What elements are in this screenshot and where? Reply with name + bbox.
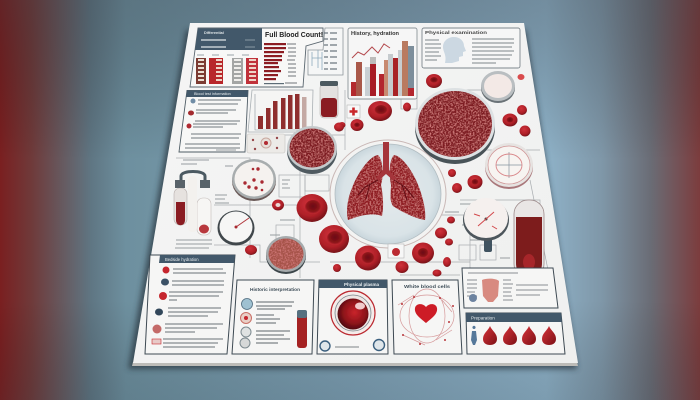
small text fragments <box>175 150 510 258</box>
heading: Physical plasma <box>344 282 380 287</box>
large petri dish <box>415 88 495 164</box>
panel: history, hydration chart <box>348 28 417 99</box>
panel: interpretation <box>232 280 314 354</box>
icons <box>240 298 252 348</box>
lungs <box>347 142 425 220</box>
panel: preparation <box>466 313 565 354</box>
heading: Physical examination <box>425 30 487 35</box>
plasma circle <box>331 291 375 335</box>
lungs circle <box>330 140 446 248</box>
heading: Historic interpretation <box>250 287 300 293</box>
panel: blood test information <box>179 90 248 152</box>
connector lines <box>176 90 552 290</box>
table columns <box>196 55 258 84</box>
panel: blood test list <box>145 255 235 354</box>
icon: blood drops <box>483 326 556 345</box>
bars <box>351 41 414 96</box>
text lines <box>256 302 294 343</box>
panel: bar chart <box>248 90 313 132</box>
magnifying ring <box>481 71 515 103</box>
panel: white blood cells <box>392 280 462 354</box>
icon: person <box>471 326 477 345</box>
trend line <box>352 44 390 58</box>
heading: History, hydration <box>351 31 399 37</box>
icon: heart <box>415 304 437 323</box>
panel: physical plasma <box>317 280 388 354</box>
icon: drop box <box>388 244 404 258</box>
cell network <box>398 289 454 345</box>
heading: Preparation <box>471 316 495 320</box>
dial dish <box>485 143 533 189</box>
horizontal bars <box>264 43 286 84</box>
bottle <box>320 81 338 118</box>
small tube <box>297 310 307 348</box>
test tube <box>514 200 544 278</box>
test tubes on stand <box>174 172 211 235</box>
panel: small diagram <box>247 134 285 153</box>
title: Full Blood Count! <box>265 30 323 39</box>
organ graphic <box>482 279 499 302</box>
icon: badges <box>320 340 384 351</box>
petri dish: upper left <box>287 126 337 174</box>
panel: blood count table <box>190 28 323 87</box>
dish with dots <box>232 159 276 201</box>
panel: organ summary <box>462 268 558 308</box>
petri dish: lower <box>266 236 306 274</box>
panel heading: Blood test information <box>194 92 231 96</box>
gauge <box>218 210 254 246</box>
panel header: differential: Differential <box>204 31 224 35</box>
face silhouette <box>443 37 466 63</box>
magnifier <box>463 198 509 252</box>
paper sheet <box>132 23 578 366</box>
panel: physical examination <box>422 28 520 68</box>
icons and text <box>185 98 241 148</box>
text lines <box>425 39 514 63</box>
heading: White blood cells <box>404 284 450 290</box>
icons and list <box>152 266 226 347</box>
heading: Bedside hydration <box>165 257 199 262</box>
icon: red cross <box>347 105 360 118</box>
panel: reference ranges <box>308 28 343 75</box>
red blood cells <box>245 74 530 276</box>
